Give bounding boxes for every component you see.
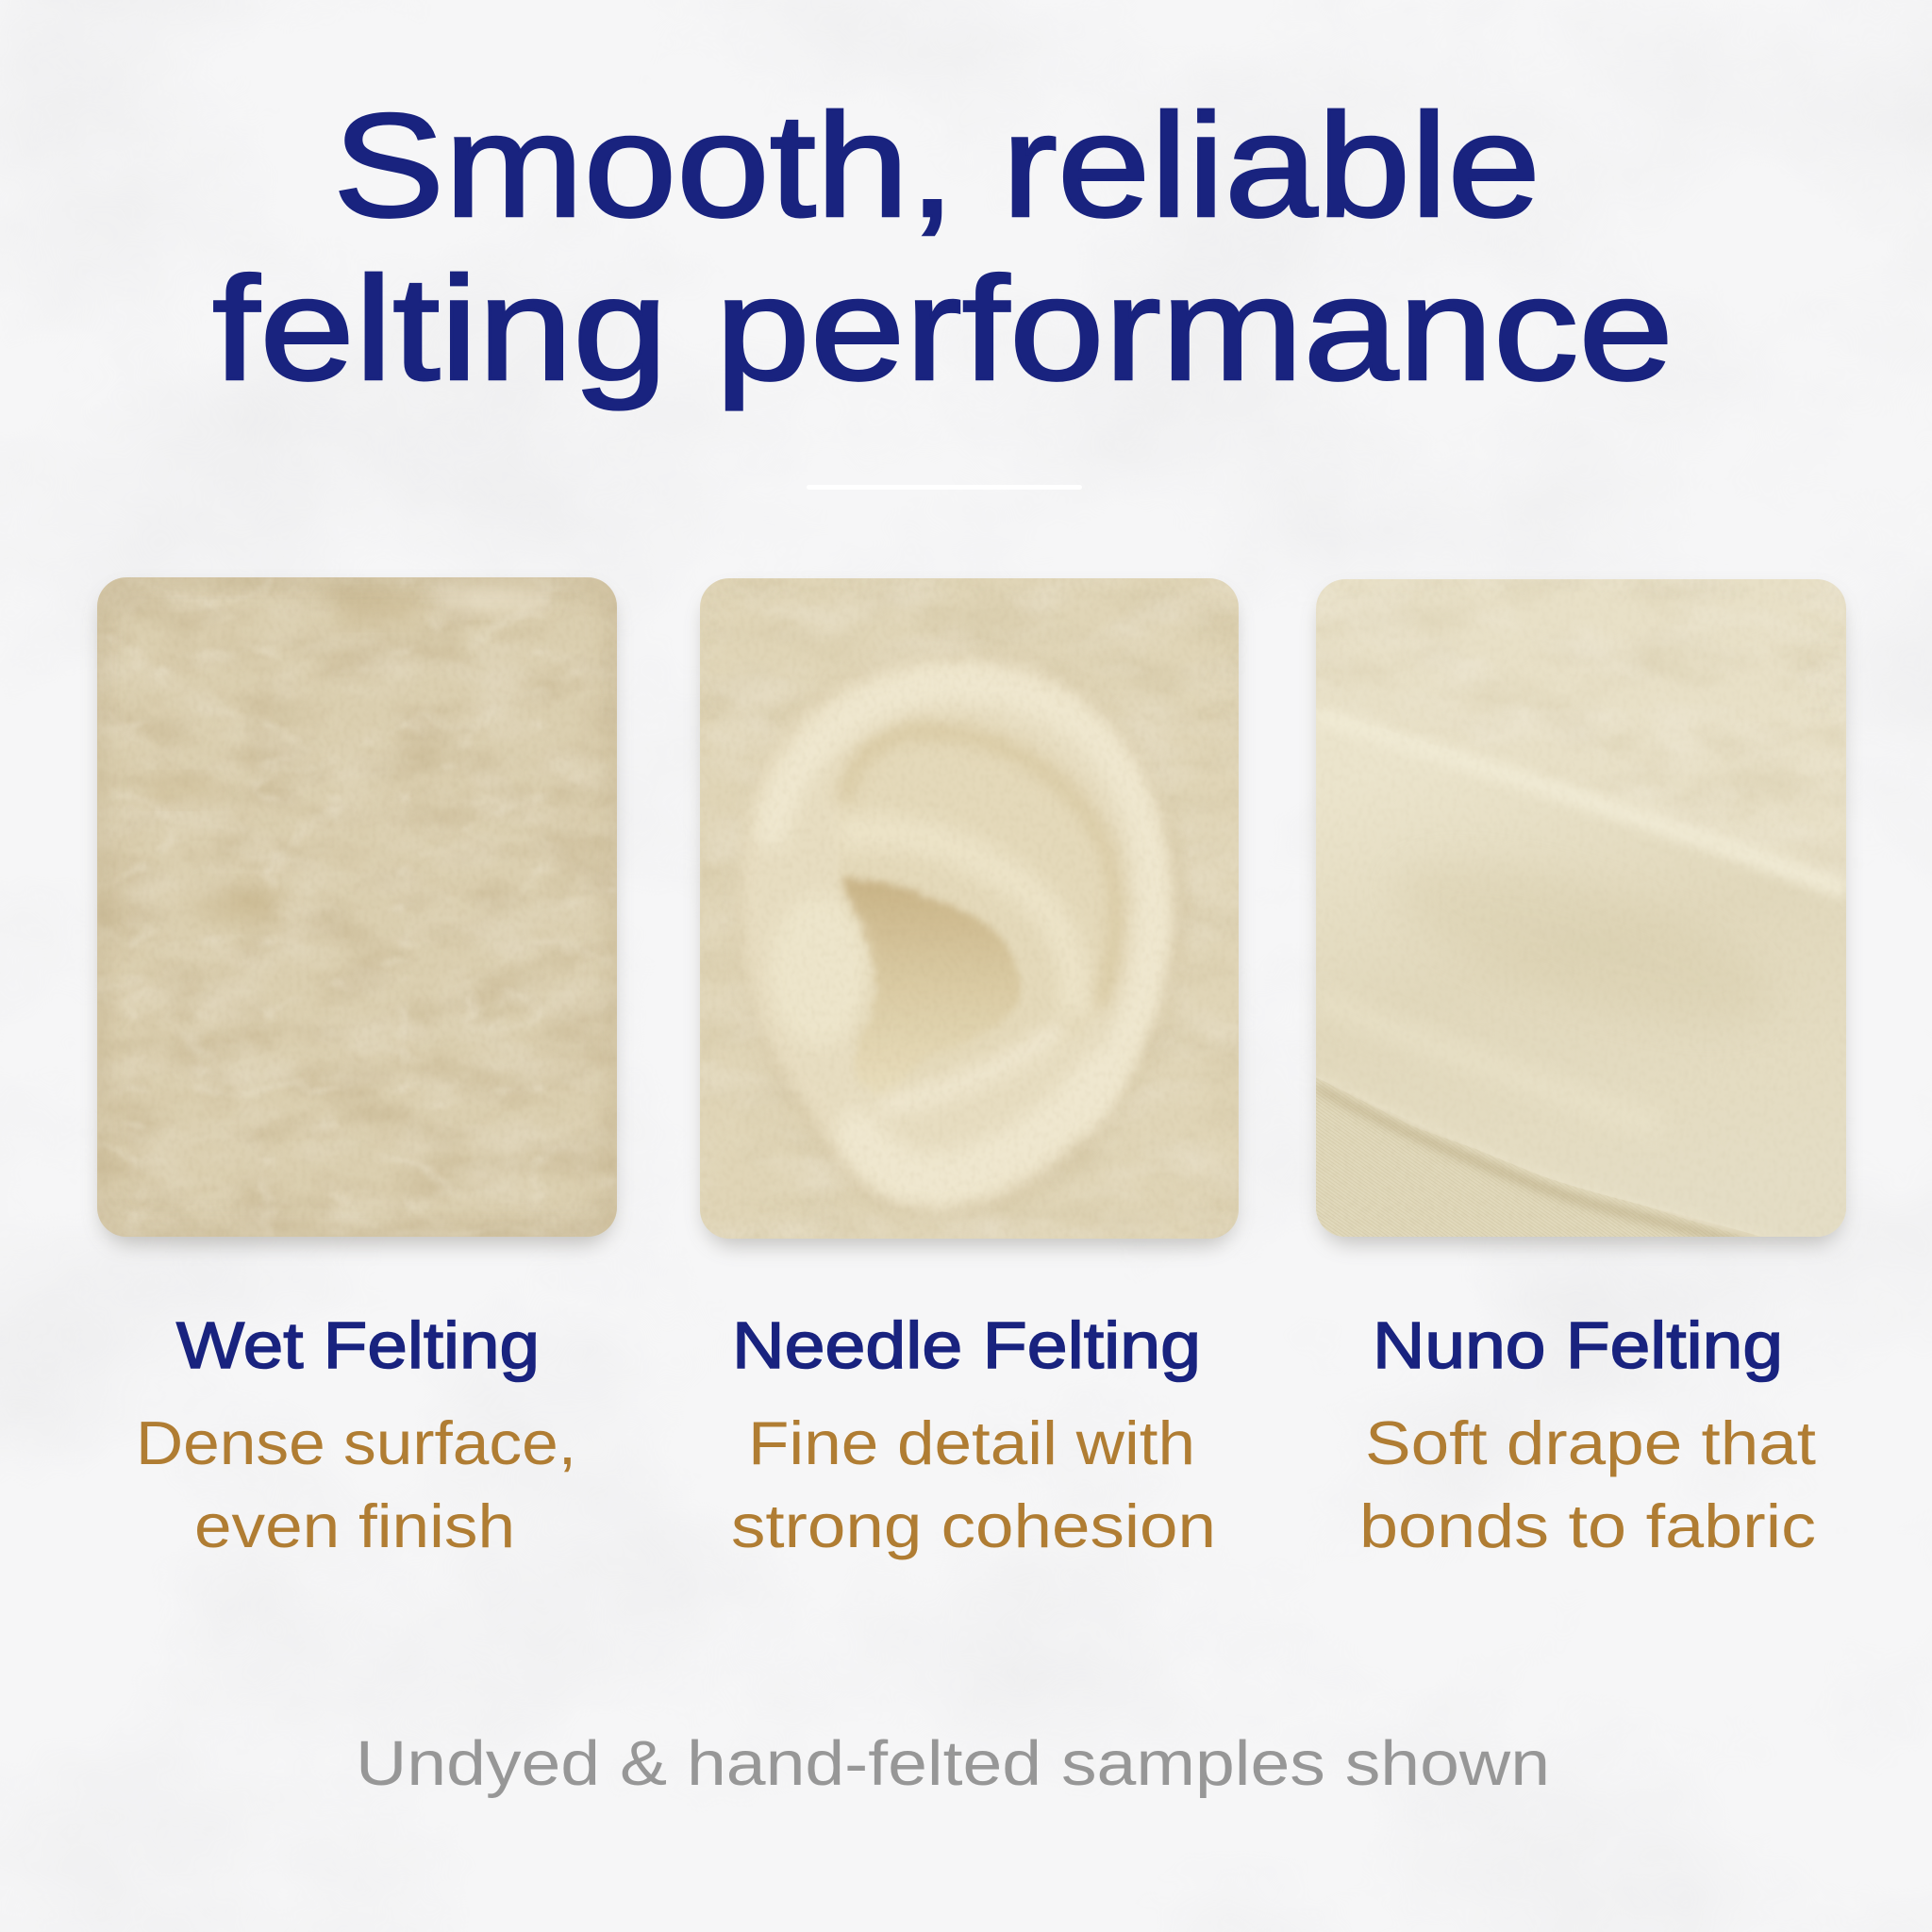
title divider	[807, 485, 1082, 490]
column: nuno felting caption: Nuno Felting	[1373, 1308, 1783, 1382]
column: needle felting caption: Fine detail with	[748, 1408, 1195, 1477]
inner hollow	[840, 724, 1120, 1104]
drape highlight edge	[1316, 715, 1846, 891]
column: needle felting caption	[731, 1308, 1216, 1560]
title: Smooth, reliable	[333, 84, 1541, 248]
ear cast shadow	[753, 874, 1184, 1217]
woven fabric corner	[1316, 1077, 1774, 1245]
column: needle felting caption: Needle Felting	[732, 1308, 1201, 1382]
drape band	[1316, 708, 1846, 1245]
tragus	[771, 895, 868, 1046]
concha hollow	[843, 877, 1020, 1093]
column: nuno felting caption	[1359, 1308, 1816, 1560]
title: felting performance	[212, 247, 1674, 411]
helix rim	[773, 683, 1154, 1108]
icon: felted ear relief	[739, 654, 1183, 1216]
drape soft shading	[1379, 828, 1790, 1058]
panel: nuno felting sample with drape	[1316, 579, 1846, 1247]
inner lobe ridge	[888, 1033, 1056, 1104]
title	[212, 84, 1674, 411]
shadow under drape	[1316, 1085, 1764, 1247]
column: wet felting caption: Wet Felting	[176, 1308, 540, 1382]
hollow rim shadow	[843, 730, 1117, 1007]
panel: needle felting sample with felted ear	[700, 578, 1239, 1246]
column: wet felting caption: Dense surface,	[136, 1408, 576, 1477]
lower lobe sweep	[858, 1077, 1101, 1180]
column: nuno felting caption: Soft drape that	[1365, 1408, 1816, 1477]
ear body	[739, 658, 1174, 1208]
column: nuno felting caption: bonds to fabric	[1359, 1491, 1816, 1560]
column: wet felting caption: even finish	[194, 1491, 515, 1560]
footer note: Undyed & hand-felted samples shown	[356, 1728, 1550, 1799]
antihelix ridge	[840, 832, 1074, 1015]
panel: wet felting sample	[97, 577, 617, 1244]
column: wet felting caption	[136, 1308, 576, 1560]
column: needle felting caption: strong cohesion	[731, 1491, 1216, 1560]
